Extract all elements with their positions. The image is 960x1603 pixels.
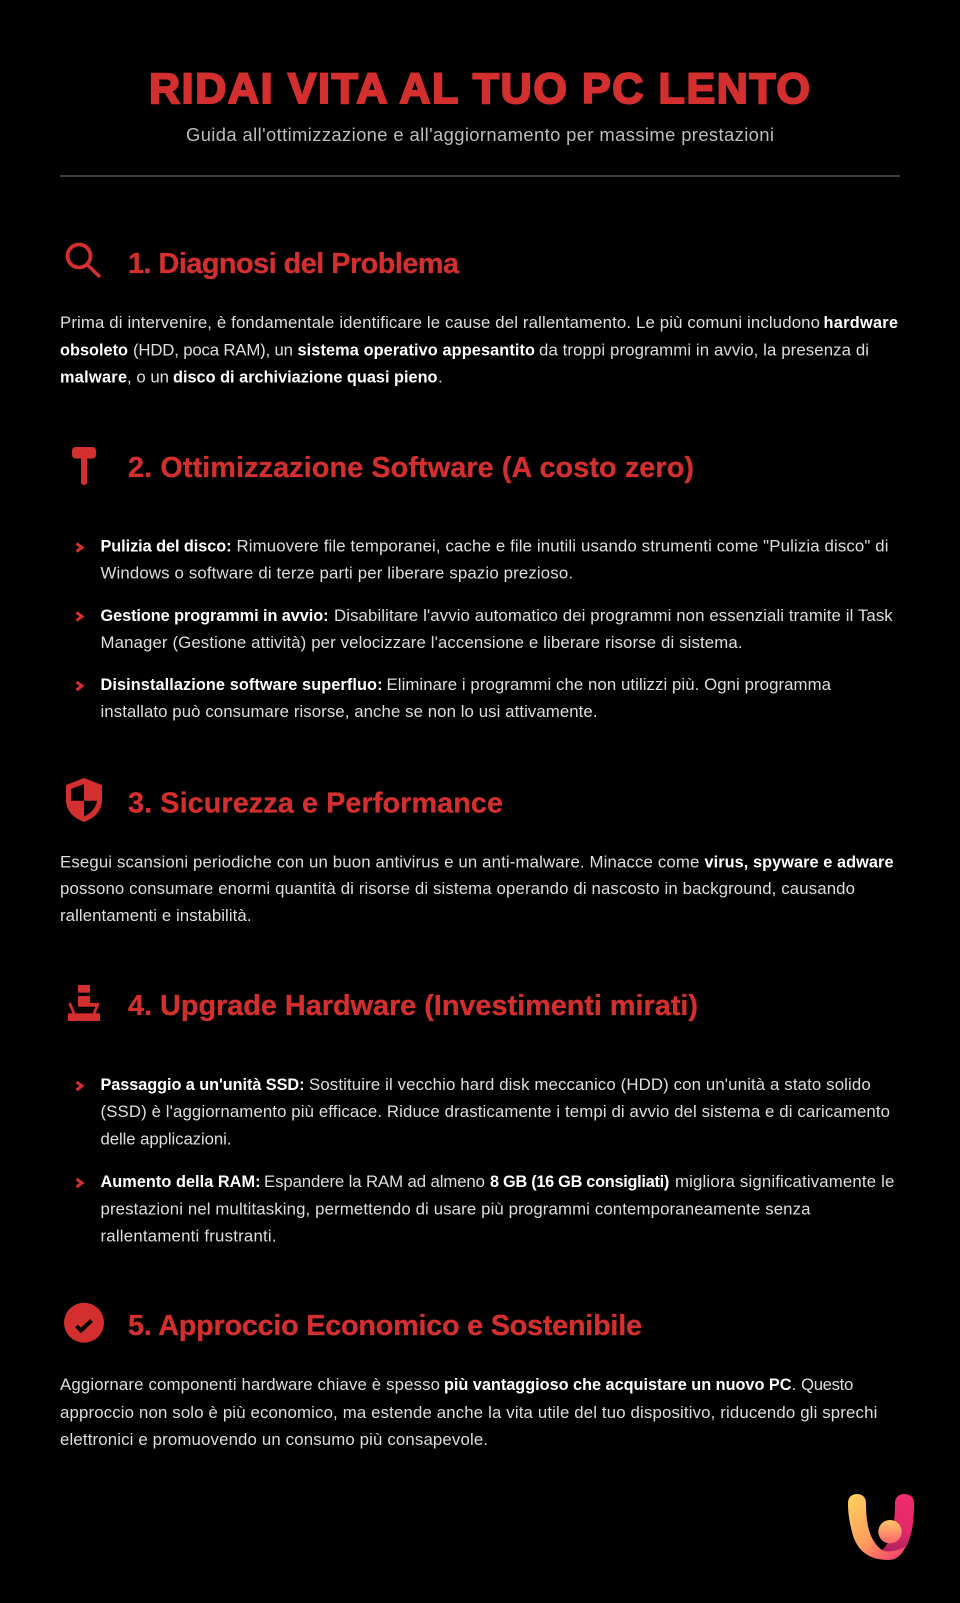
heading 1: 1. Diagnosi del Problema [128, 248, 460, 280]
icon: logo [848, 1494, 914, 1560]
list item: avvio: Manager (Gestione attività) per velocizzare l'accensione e liberare risorse di sistema. [100, 633, 742, 652]
panel: section 1 diagnosi [60, 244, 898, 386]
panel: section 5 economico [60, 1303, 877, 1449]
list item: RAM: Espandere la RAM ad almeno [264, 1172, 485, 1191]
paragraph 3: Esegui scansioni periodiche con un buon antivirus e un anti-malware. Minacce come [60, 852, 699, 872]
paragraph 3: virus, spyware e adware [704, 854, 894, 872]
paragraph 1: malware [60, 368, 127, 386]
list item: RAM: migliora significativamente le [675, 1172, 894, 1191]
paragraph 1: . [438, 368, 443, 386]
heading 3: 3. Sicurezza e Performance [128, 787, 503, 819]
panel: section 4 hardware [68, 985, 894, 1246]
icon: hammer [72, 447, 96, 485]
list item: SSD [76, 1075, 890, 1148]
list item: RAM: rallentamenti frustranti. [100, 1226, 276, 1246]
list item: RAM [76, 1172, 894, 1246]
list item: pulizia: Windows o software di terze parti per liberare spazio prezioso. [100, 564, 573, 582]
heading 5: 5. Approccio Economico e Sostenibile [128, 1310, 642, 1342]
list item: disinstallazione: Disinstallazione software superfluo: [100, 676, 382, 694]
paragraph 1: (HDD, poca RAM), un [133, 340, 293, 360]
paragraph 1 [60, 313, 898, 386]
paragraph 1: hardware [824, 314, 898, 332]
paragraph 5: Aggiornare componenti hardware chiave è spesso [60, 1375, 440, 1394]
list item: SSD: Passaggio a un'unità SSD: [100, 1076, 304, 1094]
list item: pulizia [76, 537, 888, 582]
list item: SSD: (SSD) è l'aggiornamento più efficace. Riduce drasticamente i tempi di avvio del sistema e di caricamento [100, 1102, 890, 1121]
list item: pulizia: Rimuovere file temporanei, cache e file inutili usando strumenti come "Pulizia disco" di [236, 537, 888, 556]
paragraph 3 [60, 852, 894, 925]
list item: SSD: Sostituire il vecchio hard disk meccanico (HDD) con un'unità a stato solido [309, 1075, 871, 1094]
icon: hardware upgrade [68, 985, 100, 1021]
list item: disinstallazione: installato può consumare risorse, anche se non lo usi attivamente. [100, 702, 598, 721]
list item: avvio: Disabilitare l'avvio automatico dei programmi non essenziali tramite il Task [334, 606, 893, 625]
paragraph 5: elettronici e promuovendo un consumo più consapevole. [60, 1430, 488, 1449]
heading 2: 2. Ottimizzazione Software (A costo zero) [128, 452, 694, 484]
panel: section 3 sicurezza [60, 778, 894, 925]
paragraph 1: , o un [127, 368, 169, 386]
list item: avvio: Gestione programmi in avvio: [100, 607, 328, 625]
header [60, 65, 900, 177]
list item: pulizia: Pulizia del disco: [100, 538, 232, 556]
list item: disinstallazione: Eliminare i programmi che non utilizzi più. Ogni programma [386, 675, 832, 694]
paragraph 1: da troppi programmi in avvio, la presenza di [539, 340, 869, 360]
icon: magnifying glass [68, 244, 100, 277]
paragraph 5 [60, 1375, 877, 1449]
paragraph 5: Questo [801, 1375, 853, 1394]
paragraph 3: possono consumare enormi quantità di risorse di sistema operando di nascosto in background, causando [60, 879, 855, 898]
list item: avvio [76, 606, 893, 652]
icon: shield [66, 778, 102, 822]
panel: section 2 software [72, 447, 893, 721]
heading 4: 4. Upgrade Hardware (Investimenti mirati) [128, 990, 698, 1022]
paragraph 5: . [792, 1375, 796, 1394]
paragraph 5: più vantaggioso che acquistare un nuovo PC [444, 1376, 792, 1394]
icon: check circle [64, 1303, 104, 1343]
paragraph 1: obsoleto [60, 342, 128, 360]
paragraph 3: rallentamenti e instabilità. [60, 906, 252, 925]
list item: SSD: delle applicazioni. [100, 1130, 232, 1148]
subtitle: Guida all'ottimizzazione e all'aggiornamento per massime prestazioni [186, 124, 774, 145]
list item: RAM: 8 GB (16 GB consigliati) [490, 1173, 669, 1191]
list item: disinstallazione [76, 675, 832, 721]
paragraph 1: sistema operativo appesantito [298, 342, 535, 360]
list item: RAM: Aumento della RAM: [100, 1173, 260, 1191]
paragraph 1: disco di archiviazione quasi pieno [173, 368, 438, 386]
title: RIDAI VITA AL TUO PC LENTO [149, 65, 810, 113]
paragraph 5: approccio non solo è più economico, ma estende anche la vita utile del tuo dispositivo, riducendo gli sprechi [60, 1403, 877, 1422]
list item: RAM: prestazioni nel multitasking, permettendo di usare più programmi contemporaneamente senza [100, 1199, 811, 1218]
paragraph 1: Prima di intervenire, è fondamentale identificare le cause del rallentamento. Le più comuni includono [60, 313, 820, 332]
